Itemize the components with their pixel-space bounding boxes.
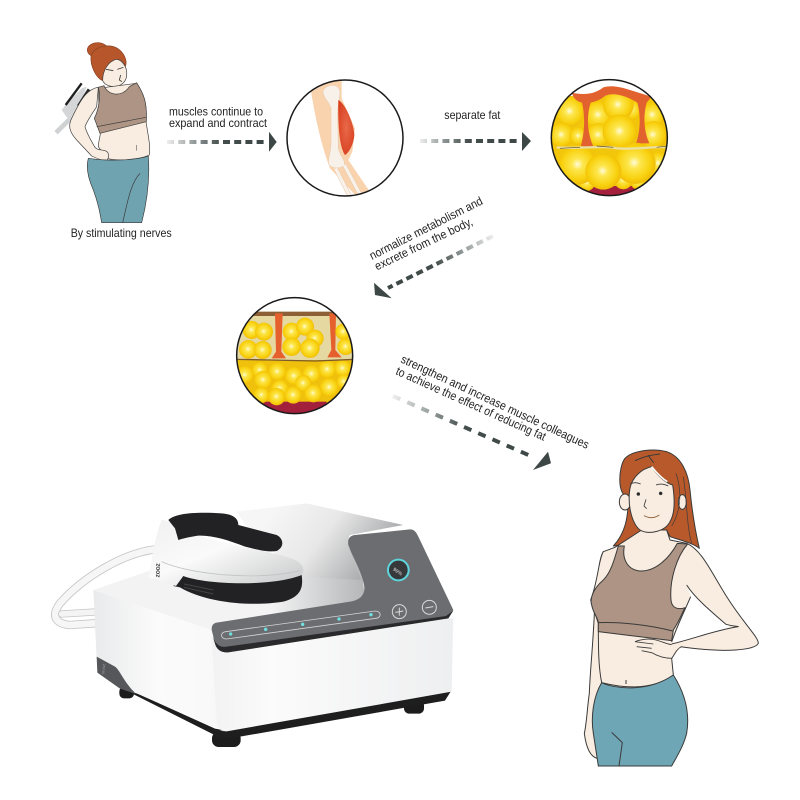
handpiece black handle <box>168 513 282 551</box>
raised rear housing <box>237 503 403 580</box>
hair <box>87 43 126 81</box>
feet <box>119 687 424 747</box>
plus button <box>392 605 406 619</box>
label: normalize metabolism: normalize metabolism and <box>367 194 485 263</box>
label: muscles continue to expand and contract: muscles continue to <box>169 105 263 119</box>
icon: handpiece device <box>56 83 89 133</box>
front panel <box>212 618 453 731</box>
label: strengthen and increase muscle: strengthen and increase muscle colleagues <box>399 352 591 452</box>
label block <box>97 657 136 694</box>
figure: overweight woman with handpiece <box>56 43 150 223</box>
side panel <box>93 590 224 731</box>
bra <box>591 543 688 641</box>
hair <box>613 450 699 548</box>
handpiece <box>148 513 303 604</box>
minus button <box>422 600 436 614</box>
cable <box>55 549 155 625</box>
figure: slim woman <box>584 450 758 766</box>
arrow 2 <box>420 132 531 151</box>
pants <box>87 156 149 223</box>
top surface <box>93 557 357 630</box>
bra <box>94 83 146 133</box>
arm edge lines <box>672 585 738 644</box>
control panel <box>212 529 453 652</box>
hand <box>635 639 682 658</box>
label: by stimulating nerves: By stimulating nerves <box>71 226 172 240</box>
label: muscles continue to expand and contract: expand and contract <box>169 116 268 130</box>
face <box>629 467 674 532</box>
base <box>118 687 452 738</box>
label: normalize metabolism: excrete from the body, <box>372 215 475 273</box>
label: strengthen and increase muscle: to achieve the effect of reducing fat <box>394 364 549 444</box>
illustration: fat cells <box>549 86 670 197</box>
handpiece dark base <box>173 575 302 604</box>
skin: left arm <box>584 552 603 758</box>
arrow 4 <box>393 396 551 470</box>
label block: mooz <box>100 663 106 674</box>
panel: fat separating circle <box>549 80 670 197</box>
display ring <box>388 560 409 580</box>
arrow 3 <box>374 236 493 298</box>
display ring: 90% <box>392 567 404 578</box>
skin: arm <box>70 87 109 160</box>
product: body contouring machine <box>55 503 453 747</box>
level slider <box>222 611 380 639</box>
handpiece: ZOOZ <box>155 563 162 577</box>
skin: face <box>103 59 127 86</box>
pants seam and navel <box>612 680 626 766</box>
label: muscles continue to expand and contract <box>169 105 268 130</box>
illustration: arm with muscle <box>311 75 371 198</box>
panel: muscle circle <box>287 75 403 198</box>
facial features <box>630 454 692 543</box>
bra band line <box>598 622 673 631</box>
pants <box>592 675 688 766</box>
skin: torso and right arm <box>591 530 758 687</box>
arrow 1 <box>167 132 277 152</box>
gap between arm and torso <box>672 586 730 642</box>
panel: fat reduced circle <box>233 298 357 417</box>
handpiece white shell <box>148 519 303 586</box>
label: separate fat: separate fat <box>444 108 501 122</box>
details: lines <box>97 67 146 223</box>
skin: torso <box>98 83 150 160</box>
illustration: reduced fat cells <box>233 312 357 417</box>
ears <box>619 494 686 510</box>
